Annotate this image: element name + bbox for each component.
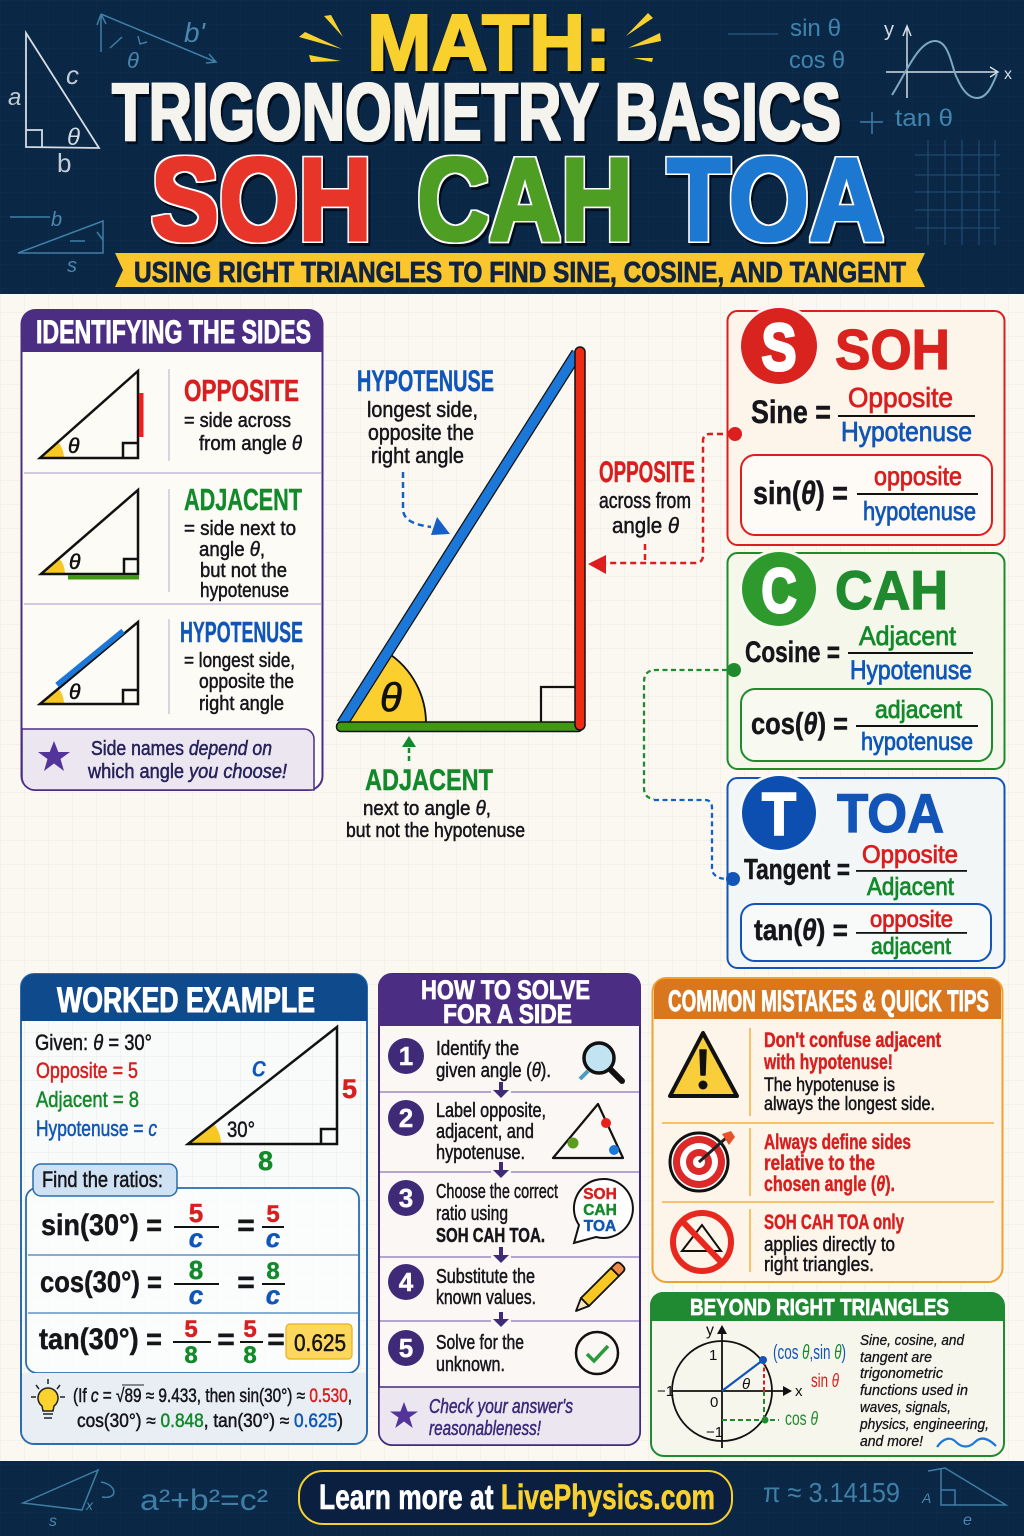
tip 3: SOH CAH TOA only: [764, 1211, 904, 1234]
row: opposite: OPPOSITE: [184, 373, 299, 408]
card: CAH: CAH: [835, 559, 948, 621]
ratios table: [26, 1164, 359, 1373]
icon: C badge: C: [762, 557, 796, 626]
given values: [35, 1030, 157, 1141]
callout: check your answer: [379, 1387, 640, 1445]
chalk tan label: tan θ: [895, 105, 953, 132]
step 1: Identify the: [436, 1038, 519, 1060]
row: tangent ratio: 5: [243, 1316, 257, 1343]
card: TOA: [726, 773, 1004, 968]
tab: find the ratios: [33, 1164, 177, 1196]
icon: magnifier: [580, 1043, 622, 1081]
chalk triangle left: [23, 1470, 114, 1530]
answer highlight: [286, 1324, 352, 1359]
label: opposite: [599, 456, 695, 538]
unit circle diagram: y: [706, 1322, 714, 1339]
row: tangent ratio: 5: [184, 1316, 198, 1343]
heading: identifying the sides: [21, 310, 323, 352]
step 4: known values.: [436, 1287, 536, 1309]
row: cosine ratio: 8: [266, 1258, 280, 1285]
note text: cos(30°) ≈ 0.848, tan(30°) ≈ 0.625): [77, 1411, 343, 1432]
step 3: SOH CAH TOA.: [436, 1225, 545, 1247]
chalk triangle left: s: [49, 1513, 57, 1530]
row: cosine ratio: 8: [189, 1255, 203, 1285]
label: adjacent: but not the hypotenuse: [346, 820, 525, 842]
label: hypotenuse: longest side,: [367, 397, 478, 422]
tangent formula box: tan(θ) =: [754, 914, 848, 947]
red opposite side: [575, 347, 585, 730]
row: hypotenuse: opposite the: [199, 671, 294, 693]
footer: [0, 1461, 1024, 1536]
title: SOH CAH TOA: [151, 134, 884, 266]
title: SOH CAH TOA: TOA: [667, 134, 884, 266]
row: sine ratio: [41, 1198, 284, 1253]
description text: trigonometric: [860, 1365, 943, 1382]
chalk triangle left: [8, 33, 99, 178]
step 2: [388, 1100, 623, 1164]
description text: physics, engineering,: [859, 1416, 989, 1433]
row: tangent ratio: [39, 1316, 352, 1369]
heading: identifying the sides: IDENTIFYING THE SIDES: [36, 314, 311, 350]
unit circle diagram: (cos θ,sin θ): [773, 1342, 846, 1364]
step 2: Label opposite,: [436, 1100, 546, 1122]
chalk formulas: sin θ: [790, 15, 841, 42]
tangent word formula: Opposite: [862, 841, 958, 869]
heading: how to solve: [378, 974, 641, 1029]
row: adjacent: but not the: [200, 560, 287, 582]
tip 1: Don't confuse adjacent: [764, 1029, 941, 1052]
icon: light bulb: [31, 1379, 65, 1418]
sine word formula: Sine =: [751, 394, 831, 430]
icon: star: [390, 1402, 418, 1428]
note text: (If c = √89 ≈ 9.433, then sin(30°) ≈ 0.530,: [73, 1386, 352, 1407]
label: opposite: angle θ: [612, 513, 679, 538]
row: adjacent: hypotenuse: [200, 580, 289, 602]
unit circle diagram: 1: [709, 1347, 717, 1364]
row: sine ratio: sin(30°) =: [41, 1209, 162, 1242]
chalk triangle top: θ: [127, 48, 139, 73]
chalk formula: pythagoras: a²+b²=c²: [140, 1484, 268, 1517]
tip 2: chosen angle (θ).: [764, 1173, 895, 1196]
header banner: [0, 0, 1024, 294]
description text: Sine, cosine, and: [860, 1332, 965, 1349]
tangent formula box: [741, 904, 991, 961]
triangle with hypotenuse marked: [40, 622, 138, 704]
icon: warning: [670, 1033, 737, 1096]
green adjacent side: [336, 722, 582, 732]
heading: worked example: WORKED EXAMPLE: [57, 981, 315, 1020]
row: cosine ratio: c: [266, 1280, 281, 1310]
tangent formula box: adjacent: [871, 933, 952, 959]
row: tangent ratio: =: [267, 1323, 285, 1356]
answer highlight: 0.625: [294, 1330, 346, 1357]
row: adjacent: angle θ,: [199, 539, 265, 561]
sine formula box: opposite: [874, 461, 962, 491]
sine word formula: Hypotenuse: [841, 416, 972, 447]
sine formula box: sin(θ) =: [753, 475, 848, 511]
tip 3: right triangles.: [764, 1254, 874, 1276]
chalk sine graph: y: [884, 19, 894, 41]
label: hypotenuse: [357, 365, 494, 468]
chalk triangle left: c: [66, 60, 79, 90]
row: cosine ratio: cos(30°) =: [40, 1266, 162, 1299]
icon: T badge: [739, 773, 819, 853]
icon: check mark: [576, 1332, 618, 1374]
triangle with adjacent side marked: θ: [69, 551, 81, 574]
row: hypotenuse: HYPOTENUSE: [180, 617, 303, 649]
unit circle diagram: x: [795, 1383, 803, 1400]
row: opposite: [40, 371, 302, 458]
example triangle: 8: [258, 1146, 273, 1176]
title sparks: [299, 13, 661, 62]
callout: side names: Side names depend on: [91, 738, 272, 760]
tip 2: relative to the: [764, 1152, 875, 1175]
panel: how to solve for a side: [378, 974, 641, 1445]
chalk triangle right: e: [963, 1512, 972, 1529]
panel: common mistakes and quick tips: [652, 978, 1002, 1282]
callout: side names: which angle you choose!: [87, 761, 287, 783]
row: tangent ratio: 8: [184, 1342, 198, 1369]
example triangle: 30°: [227, 1117, 255, 1142]
row: sine ratio: c: [266, 1223, 281, 1253]
panel: beyond right triangles: [650, 1292, 1004, 1456]
chalk triangle lower left: [10, 209, 103, 277]
chalk triangle left: x: [85, 1497, 94, 1513]
callout: side names: [22, 729, 314, 790]
icon: target: [670, 1131, 735, 1191]
chalk triangle left: a: [8, 84, 21, 111]
call to action: learn more: [299, 1471, 732, 1524]
tangent word formula: Adjacent: [867, 873, 954, 901]
chalk triangle lower left: s: [67, 255, 77, 277]
callout: check your answer: reasonableness!: [429, 1418, 541, 1440]
row: opposite: from angle θ: [199, 433, 302, 455]
heading: how to solve: HOW TO SOLVE: [421, 975, 590, 1005]
example triangle: c: [252, 1051, 266, 1082]
step 4: [388, 1262, 624, 1311]
unit circle diagram: θ: [742, 1376, 750, 1393]
icon: no triangle: [673, 1213, 731, 1271]
row: tangent ratio: 8: [243, 1342, 257, 1369]
tangent word formula: Tangent =: [744, 854, 850, 886]
example triangle: 5: [342, 1074, 357, 1104]
cosine formula box: hypotenuse: [861, 728, 973, 756]
step 3: Choose the correct: [436, 1181, 558, 1203]
description text: and more!: [860, 1433, 924, 1450]
label: adjacent: [346, 764, 525, 842]
arrow: adjacent: [402, 736, 416, 761]
step 5: [388, 1330, 618, 1376]
tip 2: [670, 1131, 911, 1196]
tip 2: Always define sides: [764, 1131, 911, 1154]
card: SOH: [728, 305, 1004, 545]
note text: [73, 1385, 352, 1432]
label: adjacent: next to angle θ,: [363, 798, 491, 820]
chalk formulas: [728, 15, 845, 74]
step 2: adjacent, and: [436, 1121, 534, 1143]
row: hypotenuse: right angle: [199, 693, 284, 715]
sine word formula: Opposite: [848, 382, 953, 413]
heading: beyond right triangles: BEYOND RIGHT TRIANGLES: [690, 1294, 949, 1320]
step 3: [388, 1179, 633, 1247]
cosine formula box: cos(θ) =: [751, 706, 848, 741]
chalk formulas: cos θ: [789, 47, 845, 74]
tip 1: [670, 1029, 941, 1115]
tip 3: applies directly to: [764, 1234, 895, 1256]
icon: star: [38, 741, 70, 771]
icon: C badge: [739, 549, 819, 629]
description text: functions used in: [860, 1382, 968, 1399]
row: cosine ratio: =: [237, 1266, 255, 1299]
example triangle: [188, 1027, 357, 1176]
step 1: given angle (θ).: [436, 1060, 551, 1082]
icon: speech bubble: SOH: [583, 1186, 617, 1203]
icon: T badge: T: [762, 781, 796, 848]
chalk triangle right: A: [921, 1490, 931, 1506]
panel: identifying the sides: [21, 310, 323, 790]
row: cosine ratio: c: [189, 1280, 204, 1310]
angle sector: [343, 653, 426, 724]
row: sine ratio: =: [237, 1209, 255, 1242]
connector dot: [728, 427, 742, 441]
tip 1: always the longest side.: [764, 1094, 935, 1115]
cosine formula box: [741, 689, 992, 761]
given values: Opposite = 5: [36, 1058, 138, 1083]
row: adjacent: = side next to: [184, 518, 296, 540]
title: SOH CAH TOA: SOH: [151, 134, 372, 266]
call to action: learn more: Learn more at LivePhysics.com: [319, 1478, 715, 1517]
description text: tangent are: [860, 1349, 932, 1366]
label: hypotenuse: opposite the: [368, 420, 474, 445]
sine formula box: hypotenuse: [863, 496, 976, 526]
tip 1: with hypotenuse!: [763, 1051, 893, 1074]
chalk triangle left: b: [57, 148, 71, 178]
arrow: cosine to tangent connector: [644, 670, 727, 879]
label: opposite: across from: [599, 488, 691, 513]
callout: check your answer: Check your answer's: [429, 1396, 573, 1418]
right angle mark: [541, 687, 575, 722]
cosine word formula: [745, 621, 973, 685]
row: tangent ratio: =: [217, 1323, 235, 1356]
chalk triangle lower left: b: [51, 209, 62, 231]
triangle with hypotenuse marked: θ: [69, 681, 81, 704]
chalk formula: pi: π ≈ 3.14159: [763, 1477, 900, 1508]
title: SOH CAH TOA: CAH: [417, 134, 633, 266]
icon: triangle with dots: [553, 1104, 623, 1158]
tip 3: [673, 1211, 904, 1276]
triangle with opposite side marked: θ: [68, 435, 80, 458]
icon: wave: [937, 1439, 996, 1447]
step 3: ratio using: [436, 1203, 508, 1225]
row: adjacent: [41, 482, 302, 602]
note strip: [22, 1373, 366, 1443]
sine formula box: [741, 455, 992, 535]
chalk grid: [915, 140, 1000, 245]
row: adjacent: ADJACENT: [184, 482, 302, 517]
connector dot: [727, 663, 741, 677]
chalk triangle top: [97, 14, 216, 73]
row: sine ratio: 5: [266, 1201, 280, 1228]
card: SOH: SOH: [835, 318, 950, 382]
step 5: unknown.: [436, 1354, 505, 1376]
step 2: hypotenuse.: [436, 1142, 525, 1164]
chalk tan label: [860, 105, 953, 134]
main labelled triangle: [336, 347, 585, 732]
row: sine ratio: c: [189, 1223, 204, 1253]
triangle with adjacent side marked: [41, 490, 139, 580]
step 3: 3: [399, 1183, 413, 1213]
step 4: Substitute the: [436, 1266, 535, 1288]
icon: S badge: S: [762, 310, 796, 384]
card: TOA: TOA: [837, 782, 944, 844]
given values: Hypotenuse = c: [36, 1116, 157, 1141]
chalk triangle left: θ: [67, 124, 80, 151]
unit circle diagram: 0: [710, 1394, 718, 1411]
cosine word formula: Cosine =: [745, 636, 840, 669]
step 1: [388, 1038, 622, 1082]
description text: waves, signals,: [860, 1399, 951, 1416]
unit circle diagram: sin θ: [811, 1371, 839, 1392]
cosine word formula: Adjacent: [859, 621, 956, 651]
flow arrows: [491, 1082, 511, 1327]
unit circle diagram: cos θ: [785, 1409, 819, 1430]
label: adjacent: ADJACENT: [365, 764, 493, 797]
label: hypotenuse: right angle: [371, 443, 464, 468]
row: tangent ratio: tan(30°) =: [39, 1323, 162, 1356]
heading: worked example: [21, 974, 367, 1021]
label: hypotenuse: HYPOTENUSE: [357, 365, 494, 398]
row: cosine ratio: [40, 1255, 285, 1310]
icon: S badge: [738, 305, 820, 387]
tab: find the ratios: Find the ratios:: [42, 1167, 163, 1192]
unit circle diagram: −1: [657, 1383, 674, 1400]
unit circle diagram: −1: [706, 1424, 723, 1441]
description text: [859, 1332, 989, 1450]
subtitle ribbon: USING RIGHT TRIANGLES TO FIND SINE, COSINE, AND TANGENT: [134, 257, 906, 289]
row: hypotenuse: = longest side,: [184, 650, 295, 672]
icon: speech bubble: [574, 1179, 633, 1243]
main labelled triangle: θ: [380, 676, 402, 720]
step 1: 1: [399, 1041, 413, 1071]
panel: worked example: [21, 974, 367, 1444]
cosine formula box: adjacent: [875, 696, 962, 724]
chalk sine graph: x: [1004, 66, 1012, 83]
step 4: 4: [399, 1267, 414, 1297]
sine word formula: [751, 382, 975, 447]
row: opposite: = side across: [184, 410, 291, 432]
chalk triangle top: b': [184, 17, 207, 48]
heading: how to solve: FOR A SIDE: [443, 999, 572, 1029]
arrow: opposite: [588, 434, 733, 574]
card: CAH: [727, 549, 1004, 769]
triangle with opposite side marked: [40, 371, 144, 458]
cosine word formula: Hypotenuse: [850, 655, 972, 685]
icon: pencil: [576, 1262, 624, 1311]
given values: Adjacent = 8: [36, 1087, 139, 1112]
icon: speech bubble: CAH: [583, 1202, 617, 1219]
title: MATH: MATH:: [367, 0, 611, 87]
connector dot: [726, 872, 740, 886]
step 2: 2: [399, 1103, 413, 1133]
row: sine ratio: 5: [189, 1198, 203, 1228]
tangent word formula: [744, 841, 967, 901]
tip 1: The hypotenuse is: [764, 1075, 895, 1096]
unit circle diagram: [657, 1322, 846, 1448]
row: hypotenuse: [40, 617, 303, 715]
tangent formula box: opposite: [870, 906, 953, 932]
step 5: 5: [399, 1333, 413, 1363]
chalk sine graph: [884, 19, 1012, 98]
step 5: Solve for the: [436, 1332, 524, 1354]
icon: speech bubble: TOA: [584, 1218, 616, 1235]
chalk triangle right: [921, 1468, 1006, 1529]
blue hypotenuse: [342, 353, 577, 724]
given values: Given: θ = 30°: [35, 1030, 152, 1055]
arrow: hypotenuse: [403, 472, 450, 535]
label: opposite: OPPOSITE: [599, 456, 695, 489]
